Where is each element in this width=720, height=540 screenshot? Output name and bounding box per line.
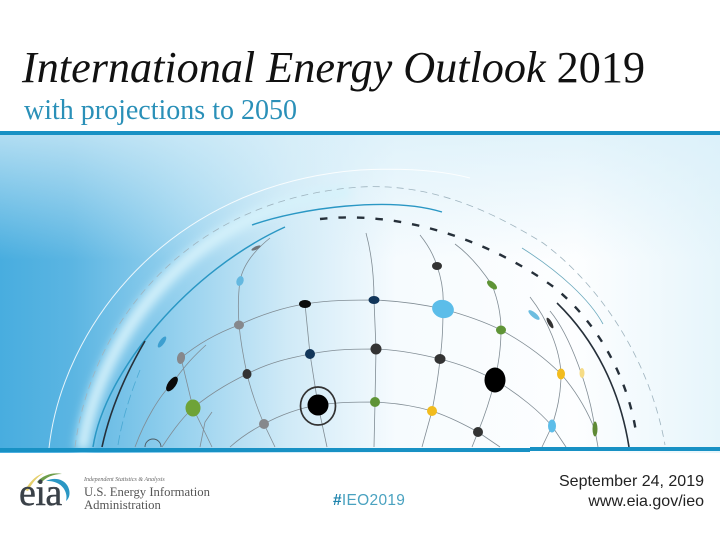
logo arcs [25,473,70,501]
EIA logo: U.S. Energy Information [84,485,210,499]
hashtag: #IEO2019 [333,492,405,509]
date and url: September 24, 2019 [559,473,704,490]
globe atmosphere glow [82,192,350,450]
target node [300,387,336,425]
globe grid lines [135,233,598,447]
date and url [559,473,704,510]
date and url: www.eia.gov/ieo [588,492,704,510]
agency name: Independent Statistics & Analysis [84,477,165,483]
black arcs [102,217,636,447]
dashed outer arc [75,187,665,447]
logo wordmark: eia [19,472,62,514]
outer white arc [49,169,470,448]
grid nodes [145,244,598,447]
EIA logo: Administration [84,498,161,512]
bottom rule [0,448,530,452]
title: International Energy Outlook 2019 [22,43,645,92]
globe illustration panel [0,131,720,453]
EIA logo [19,472,210,514]
background gradient [0,131,720,453]
subtitle: with projections to 2050 [24,94,297,126]
blue arcs [93,204,603,447]
top rule [0,131,720,135]
